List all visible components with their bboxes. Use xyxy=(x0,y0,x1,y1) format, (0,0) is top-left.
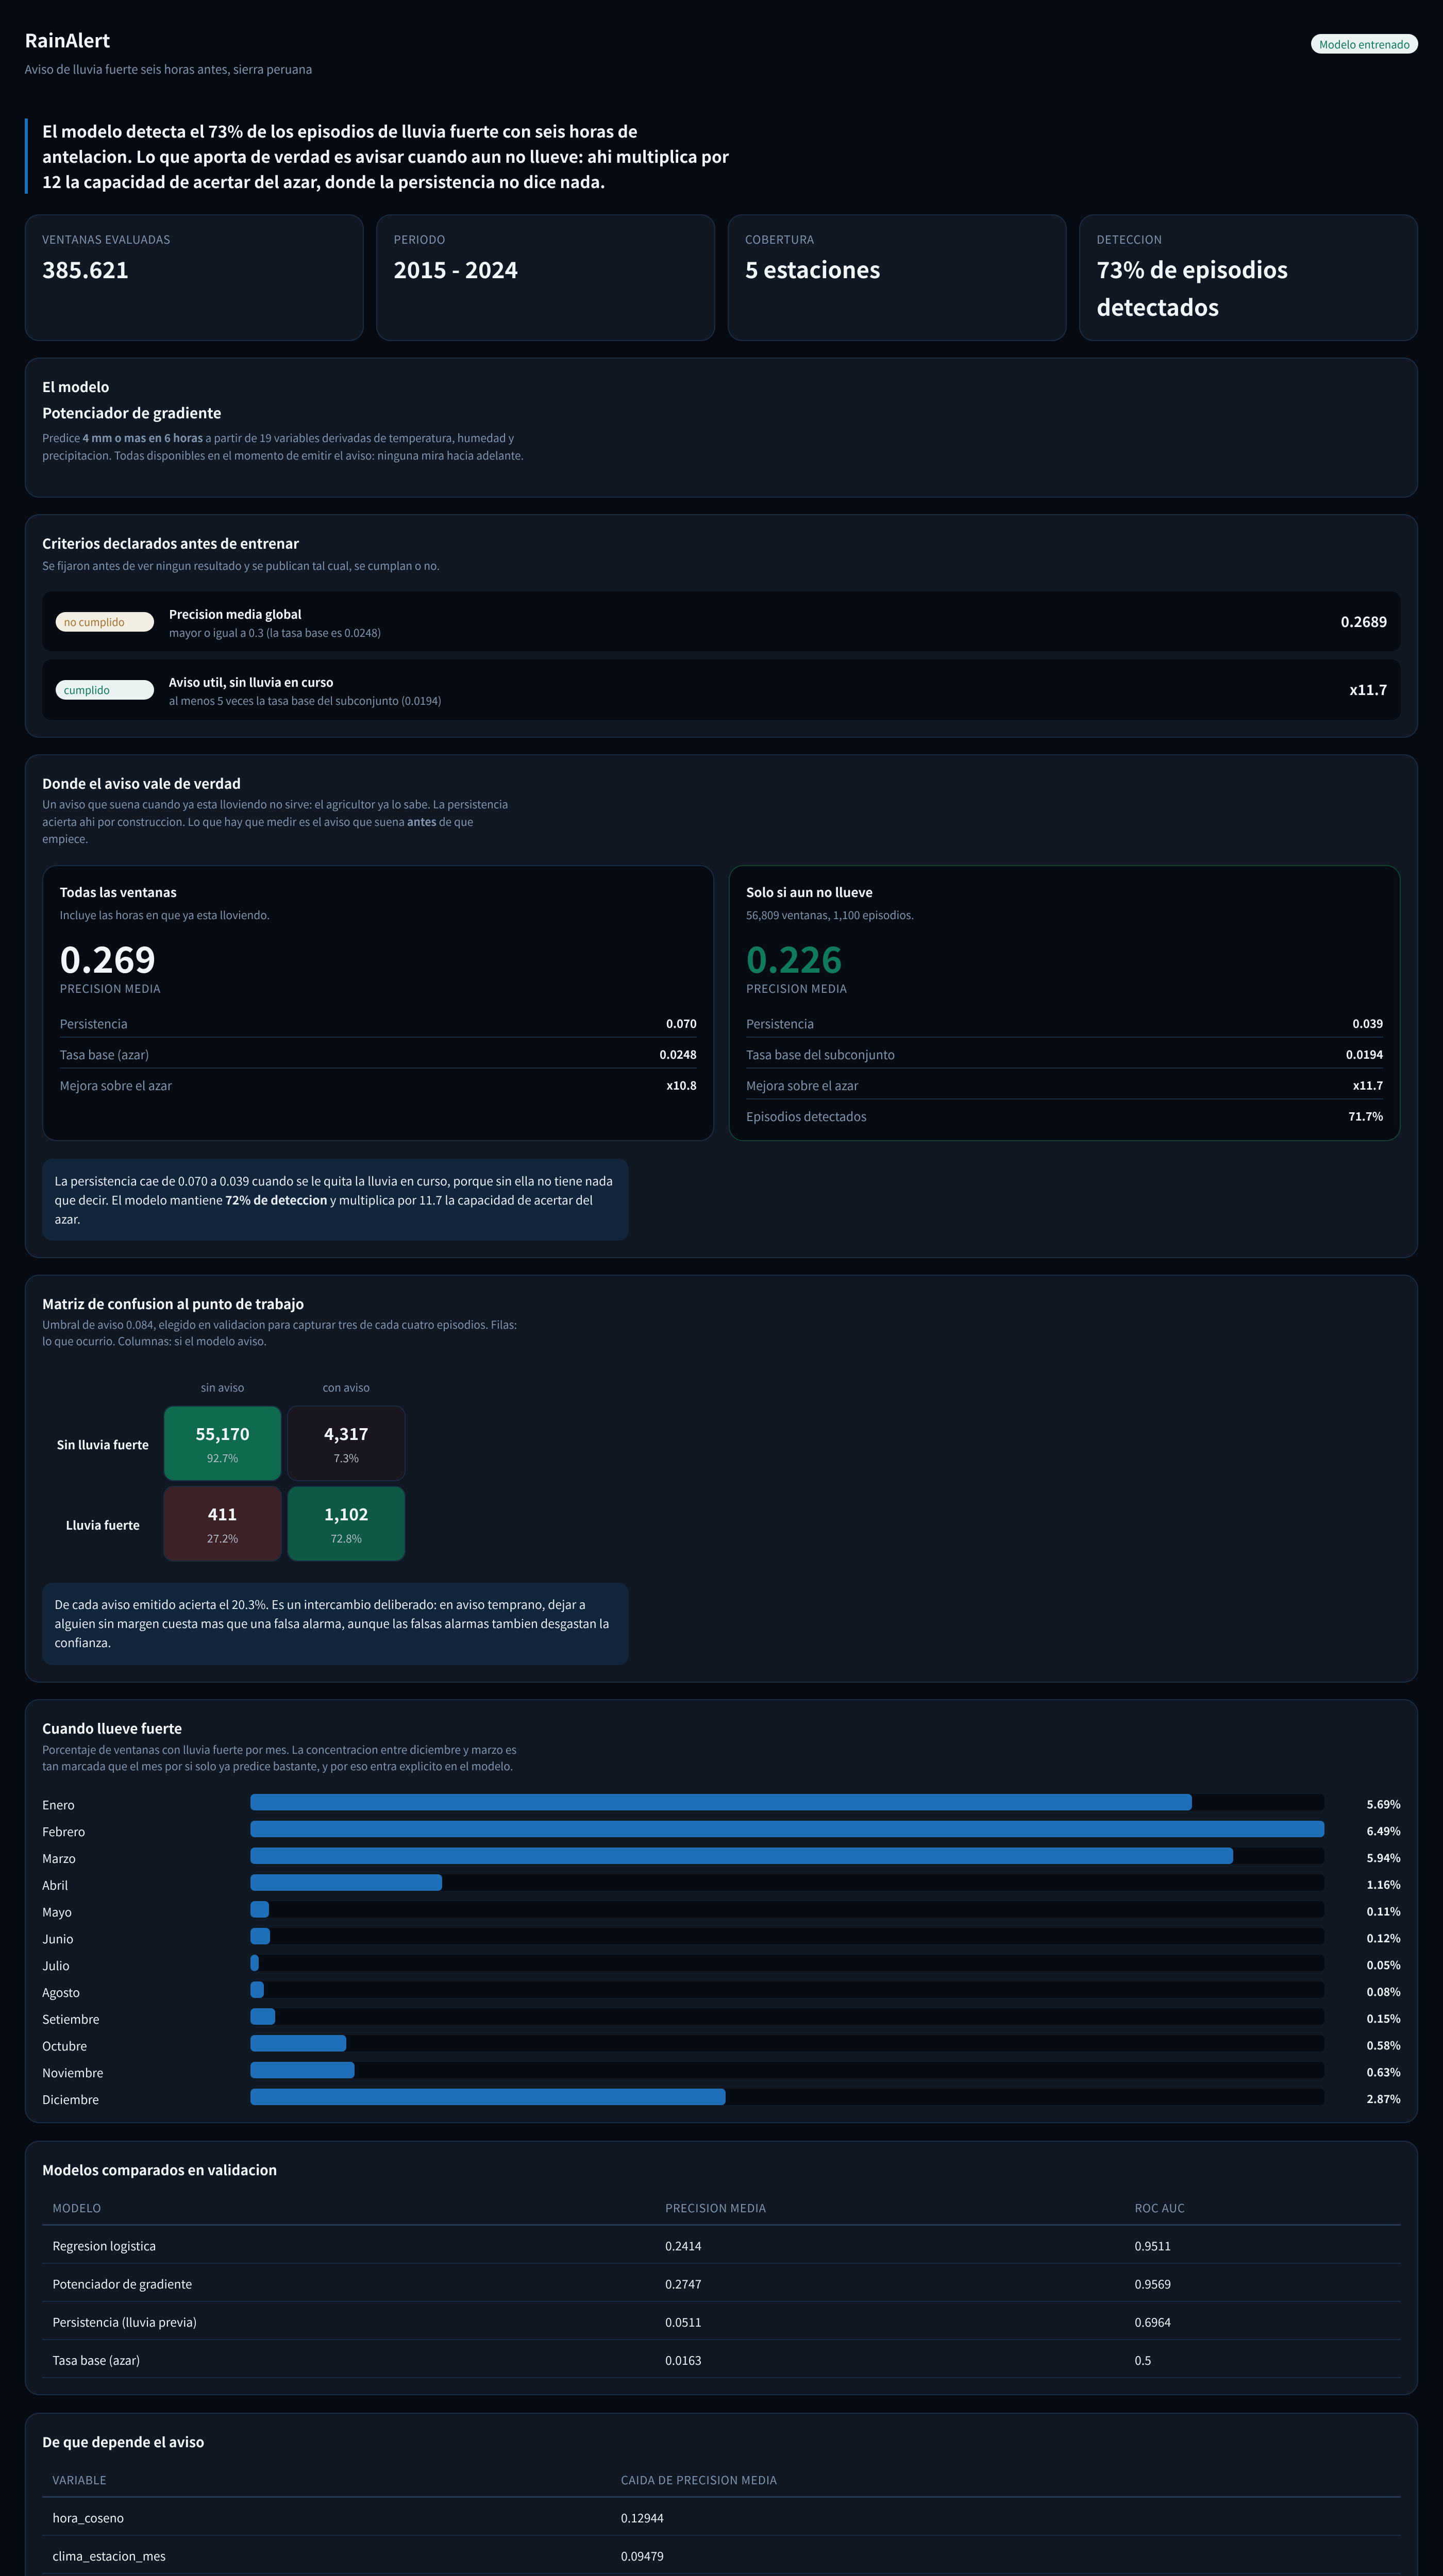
bar chart: monthly rate: 6.49% xyxy=(1367,1823,1401,1839)
cell: falsas alarmas xyxy=(287,1405,406,1481)
bar chart: monthly rate: Mayo xyxy=(42,1903,72,1920)
table: modelos xyxy=(42,2199,1401,2378)
heading: Cuando llueve fuerte xyxy=(42,1718,182,1738)
cell: episodios detectados: 1,102 xyxy=(324,1502,368,1526)
cell: verdaderos negativos: 92.7% xyxy=(207,1450,238,1466)
bar chart: monthly rate: 5.94% xyxy=(1367,1850,1401,1866)
status pill xyxy=(1311,34,1418,54)
stat card: periodo xyxy=(376,214,715,341)
heading: Criterios declarados antes de entrenar xyxy=(42,533,299,553)
panel: criterios xyxy=(25,514,1418,738)
big number: 0.269 xyxy=(60,931,156,984)
criterion: precision media global: 0.2689 xyxy=(1341,611,1387,631)
cell: falsas alarmas: 7.3% xyxy=(334,1450,359,1466)
cell: episodios perdidos xyxy=(163,1486,282,1562)
table: modelos: ROC AUC xyxy=(1135,2199,1185,2216)
cell: falsas alarmas: 4,317 xyxy=(324,1421,368,1445)
status pill: Modelo entrenado xyxy=(1319,36,1410,52)
metrics list: 0.070 xyxy=(666,1015,697,1031)
stat card: deteccion xyxy=(1079,214,1418,341)
stat card: cobertura xyxy=(728,214,1067,341)
heading: El modelo xyxy=(42,376,109,396)
table: modelos: 0.0163 xyxy=(665,2351,701,2368)
panel: de que depende el aviso xyxy=(25,2413,1418,2576)
table: importancia de variables: VARIABLE xyxy=(53,2471,107,2488)
bar chart: monthly rate: 2.87% xyxy=(1367,2091,1401,2107)
cell: episodios perdidos: 411 xyxy=(208,1502,237,1526)
comparison card: todas las ventanas xyxy=(42,865,714,1141)
metrics list: 71.7% xyxy=(1349,1108,1383,1124)
stat card: ventanas evaluadas: 385.621 xyxy=(42,252,129,285)
confusion matrix xyxy=(57,1380,406,1562)
bar chart: monthly rate: Junio xyxy=(42,1929,74,1947)
callout xyxy=(42,1583,629,1665)
bar chart: monthly rate: 0.12% xyxy=(1367,1930,1401,1946)
header: subtitle: Aviso de lluvia fuerte seis horas antes, sierra peruana xyxy=(25,60,312,77)
bar chart: monthly rate: 5.69% xyxy=(1367,1796,1401,1812)
bar chart: monthly rate: 0.63% xyxy=(1367,2064,1401,2080)
criterion: aviso util: al menos 5 veces la tasa base del subconjunto (0.0194) xyxy=(169,693,442,708)
intro text xyxy=(42,1742,516,1774)
table: importancia de variables: 0.09479 xyxy=(621,2547,664,2564)
bar chart: monthly rate: Julio xyxy=(42,1956,70,1974)
metrics list xyxy=(60,1014,697,1094)
big number: 0.226 xyxy=(746,931,843,984)
table: modelos: Potenciador de gradiente xyxy=(53,2275,192,2292)
metrics list: Tasa base del subconjunto xyxy=(746,1045,895,1063)
callout: azar. xyxy=(55,1210,80,1227)
bar chart: monthly rate: 0.58% xyxy=(1367,2037,1401,2053)
confusion matrix: con aviso xyxy=(323,1380,370,1395)
table: modelos: 0.9511 xyxy=(1135,2236,1171,2254)
lead statement: El modelo detecta el 73% de los episodios de lluvia fuerte con seis horas de xyxy=(42,119,637,143)
metrics list: x10.8 xyxy=(667,1077,697,1093)
bar chart: monthly rate: 0.11% xyxy=(1367,1903,1401,1919)
table: importancia de variables xyxy=(42,2471,1401,2574)
bar chart: monthly rate: Diciembre xyxy=(42,2090,99,2108)
metrics list: Tasa base (azar) xyxy=(60,1045,149,1063)
criterion: precision media global: Precision media global xyxy=(169,605,301,622)
table: modelos: 0.5 xyxy=(1135,2351,1151,2368)
table: importancia de variables: clima_estacion_mes xyxy=(53,2547,165,2564)
badge: no cumplido xyxy=(56,612,154,632)
table: modelos: Regresion logistica xyxy=(53,2236,156,2254)
table: modelos: 0.6964 xyxy=(1135,2313,1171,2330)
metrics list: 0.0194 xyxy=(1346,1046,1383,1062)
metrics list: Persistencia xyxy=(60,1014,128,1032)
bar chart: monthly rate: 0.05% xyxy=(1367,1957,1401,1973)
callout: confianza. xyxy=(55,1633,111,1651)
panel: donde el aviso vale de verdad xyxy=(25,754,1418,1258)
description: Predice 4 mm o mas en 6 horas a partir de 19 variables derivadas de temperatura, humedad y xyxy=(42,430,514,446)
bar chart: monthly rate: Enero xyxy=(42,1795,75,1813)
table: modelos: Tasa base (azar) xyxy=(53,2351,140,2368)
table: importancia de variables: hora_coseno xyxy=(53,2509,124,2526)
intro text: lo que ocurrio. Columnas: si el modelo aviso. xyxy=(42,1333,267,1349)
criterion: precision media global: mayor o igual a 0.3 (la tasa base es 0.0248) xyxy=(169,625,381,640)
stat card: ventanas evaluadas: VENTANAS EVALUADAS xyxy=(42,231,171,247)
stat card: periodo: 2015 - 2024 xyxy=(394,252,518,285)
description xyxy=(42,430,524,463)
panel: modelos comparados xyxy=(25,2141,1418,2395)
comparison card: solo si aun no llueve: PRECISION MEDIA xyxy=(746,980,847,996)
comparison card: todas las ventanas: Incluye las horas en que ya esta lloviendo. xyxy=(60,907,270,923)
metrics list: Mejora sobre el azar xyxy=(746,1076,859,1094)
stat card: cobertura: 5 estaciones xyxy=(745,252,880,285)
heading: De que depende el aviso xyxy=(42,2431,205,2451)
comparison card: solo si aun no llueve: Solo si aun no llueve xyxy=(746,883,873,901)
table: modelos: Persistencia (lluvia previa) xyxy=(53,2313,197,2330)
metrics list: Mejora sobre el azar xyxy=(60,1076,172,1094)
bar chart: monthly rate: Octubre xyxy=(42,2037,87,2054)
bar chart: monthly rate: Noviembre xyxy=(42,2063,103,2081)
badge: cumplido xyxy=(56,680,154,700)
table: importancia de variables: 0.12944 xyxy=(621,2509,664,2526)
intro text: Porcentaje de ventanas con lluvia fuerte por mes. La concentracion entre diciembre y marzo es xyxy=(42,1742,516,1757)
stat card: deteccion: detectados xyxy=(1097,290,1219,323)
intro text: Un aviso que suena cuando ya esta lloviendo no sirve: el agricultor ya lo sabe. La persistencia xyxy=(42,796,508,812)
criterion: aviso util: Aviso util, sin lluvia en curso xyxy=(169,673,333,690)
lead statement xyxy=(25,118,746,194)
cell: episodios detectados: 72.8% xyxy=(331,1531,362,1546)
intro text: tan marcada que el mes por si solo ya predice bastante, y por eso entra explicito en el modelo. xyxy=(42,1758,513,1774)
table: modelos: MODELO xyxy=(53,2199,102,2216)
heading: Modelos comparados en validacion xyxy=(42,2159,277,2179)
metrics list: 0.0248 xyxy=(660,1046,697,1062)
stat card: periodo: PERIODO xyxy=(394,231,446,247)
bar chart: monthly rate: Marzo xyxy=(42,1849,76,1867)
bar chart: monthly rate: 0.15% xyxy=(1367,2010,1401,2026)
callout: que decir. El modelo mantiene 72% de deteccion y multiplica por 11.7 la capacidad de acertar del xyxy=(55,1191,593,1208)
table: modelos: 0.0511 xyxy=(665,2313,701,2330)
description: precipitacion. Todas disponibles en el momento de emitir el aviso: ninguna mira hacia adelante. xyxy=(42,448,524,463)
comparison card: solo si aun no llueve: 56,809 ventanas, 1,100 episodios. xyxy=(746,907,914,923)
metrics list: x11.7 xyxy=(1353,1077,1383,1093)
panel: cuando llueve fuerte xyxy=(25,1699,1418,2123)
stat card: deteccion: DETECCION xyxy=(1097,231,1162,247)
table: modelos: 0.2747 xyxy=(665,2275,701,2292)
bar chart: monthly rate xyxy=(42,1794,1401,2108)
intro text xyxy=(42,1317,517,1349)
badge: cumplido: cumplido xyxy=(64,682,110,697)
intro text: Se fijaron antes de ver ningun resultado y se publican tal cual, se cumplan o no. xyxy=(42,558,440,573)
criterion: aviso util: x11.7 xyxy=(1350,679,1387,699)
confusion matrix: Sin lluvia fuerte xyxy=(57,1435,149,1453)
callout: La persistencia cae de 0.070 a 0.039 cuando se le quita la lluvia en curso, porque sin ella no tiene nada xyxy=(55,1172,613,1189)
table: importancia de variables: CAIDA DE PRECISION MEDIA xyxy=(621,2471,777,2488)
metrics list: Persistencia xyxy=(746,1014,814,1032)
criterion: aviso util xyxy=(42,659,1401,720)
cell: verdaderos negativos xyxy=(163,1405,282,1481)
comparison card: todas las ventanas: PRECISION MEDIA xyxy=(60,980,161,996)
panel: matriz de confusion xyxy=(25,1275,1418,1683)
intro text xyxy=(42,796,508,846)
comparison card: solo si aun no llueve xyxy=(729,865,1401,1141)
bar chart: monthly rate: Abril xyxy=(42,1876,68,1893)
intro text: empiece. xyxy=(42,831,88,846)
comparison card: todas las ventanas: Todas las ventanas xyxy=(60,883,177,901)
header: app title: RainAlert xyxy=(25,26,110,53)
heading: Donde el aviso vale de verdad xyxy=(42,773,241,793)
bar chart: monthly rate: Agosto xyxy=(42,1983,80,2001)
stat card: ventanas evaluadas xyxy=(25,214,364,341)
intro text: acierta ahi por construccion. Lo que hay que medir es el aviso que suena antes de que xyxy=(42,814,473,829)
table: modelos: 0.2414 xyxy=(665,2236,701,2254)
lead statement: 12 la capacidad de acertar del azar, donde la persistencia no dice nada. xyxy=(42,170,606,193)
bar chart: monthly rate: 1.16% xyxy=(1367,1876,1401,1892)
intro text: Umbral de aviso 0.084, elegido en validacion para capturar tres de cada cuatro episodios. Filas: xyxy=(42,1317,517,1332)
callout xyxy=(42,1159,629,1241)
panel: el modelo xyxy=(25,358,1418,498)
table: modelos: 0.9569 xyxy=(1135,2275,1171,2292)
stat card: deteccion: 73% de episodios xyxy=(1097,252,1288,285)
bar chart: monthly rate: 0.08% xyxy=(1367,1984,1401,1999)
cell: verdaderos negativos: 55,170 xyxy=(196,1421,249,1445)
table: modelos: PRECISION MEDIA xyxy=(665,2199,766,2216)
callout: alguien sin margen cuesta mas que una falsa alarma, aunque las falsas alarmas tambien desgastan la xyxy=(55,1614,609,1632)
stat card: cobertura: COBERTURA xyxy=(745,231,814,247)
bar chart: monthly rate: Febrero xyxy=(42,1822,85,1840)
lead statement: antelacion. Lo que aporta de verdad es avisar cuando aun no llueve: ahi multiplica por xyxy=(42,144,729,168)
model name: Potenciador de gradiente xyxy=(42,402,222,423)
cell: episodios detectados xyxy=(287,1486,406,1562)
metrics list: Episodios detectados xyxy=(746,1107,867,1125)
criterion: precision media global xyxy=(42,591,1401,651)
bar chart: monthly rate: Setiembre xyxy=(42,2010,99,2027)
confusion matrix: Lluvia fuerte xyxy=(66,1516,140,1533)
heading: Matriz de confusion al punto de trabajo xyxy=(42,1293,304,1313)
badge: no cumplido: no cumplido xyxy=(64,614,125,629)
callout: De cada aviso emitido acierta el 20.3%. Es un intercambio deliberado: en aviso temprano, dejar a xyxy=(55,1595,585,1613)
confusion matrix: sin aviso xyxy=(201,1380,244,1395)
metrics list xyxy=(746,1014,1383,1125)
metrics list: 0.039 xyxy=(1353,1015,1383,1031)
cell: episodios perdidos: 27.2% xyxy=(207,1531,238,1546)
